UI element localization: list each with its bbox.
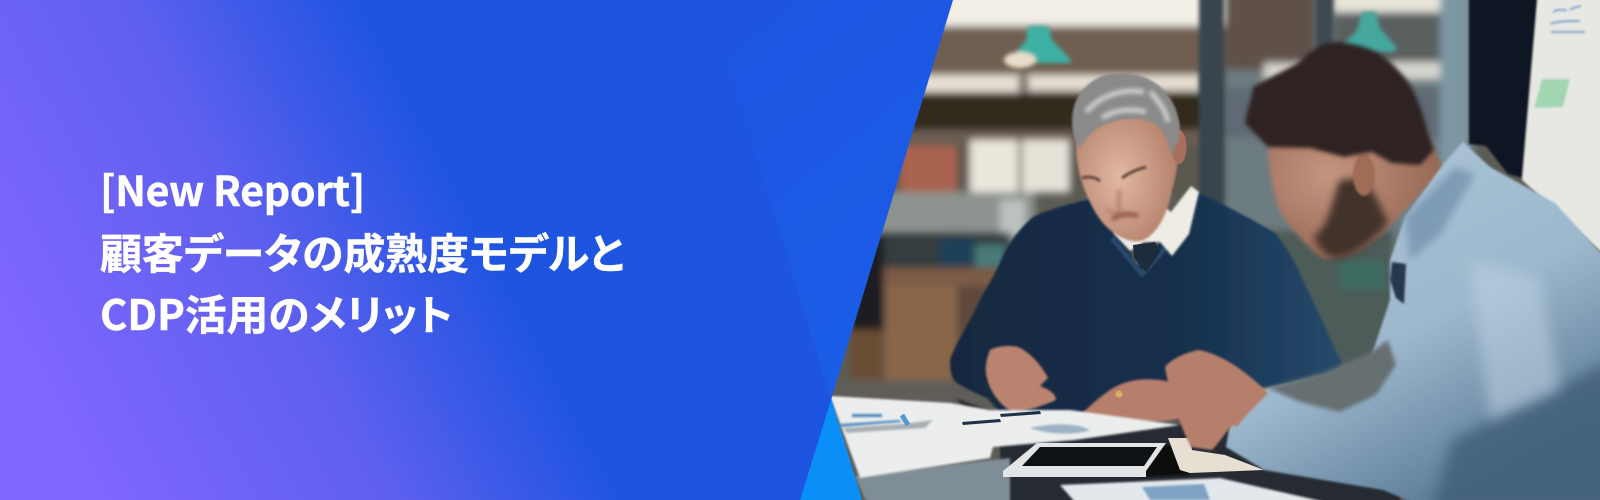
photo: two men reviewing reports at a table bbox=[800, 0, 1600, 500]
denim shirt bbox=[1226, 142, 1600, 500]
binder shadow bbox=[843, 420, 933, 433]
whiteboard bbox=[1522, 0, 1600, 260]
gray hair bbox=[1072, 73, 1180, 156]
man with denim shirt bbox=[1165, 42, 1600, 500]
photo background: blurred office interior bbox=[820, 0, 1474, 405]
shirt collar bbox=[1114, 186, 1199, 256]
placket shadow bbox=[1390, 262, 1406, 304]
paper, bottom bbox=[1060, 478, 1325, 500]
sleeve dark fold bbox=[1268, 340, 1396, 412]
report chart map bbox=[1030, 424, 1090, 434]
hand, resting bbox=[1073, 379, 1184, 423]
headline line 2: 顧客データの成熟度モデルと bbox=[100, 220, 624, 282]
tie bbox=[1133, 242, 1160, 272]
beard bbox=[1314, 178, 1388, 258]
tablet screen bbox=[1022, 447, 1157, 466]
tablet bbox=[1003, 443, 1166, 477]
mouth bbox=[1112, 214, 1138, 219]
dark hair bbox=[1245, 42, 1434, 165]
headline line 1: [New Report] bbox=[100, 158, 365, 218]
wedding ring bbox=[1116, 390, 1122, 398]
light blue triangle accent bbox=[800, 398, 862, 500]
hand, pointing bbox=[986, 346, 1056, 412]
sweater V-neck ribbing bbox=[1112, 192, 1192, 274]
blue facet panel bbox=[708, 0, 953, 400]
table top bbox=[955, 398, 1400, 500]
bottom sheet chart bars bbox=[1142, 484, 1210, 500]
photo base fill bbox=[800, 0, 1600, 500]
glass partition columns bbox=[1199, 0, 1333, 205]
collar shadow bbox=[1405, 167, 1475, 260]
nose shading bbox=[1106, 190, 1121, 213]
pendant lamp, right bbox=[1339, 12, 1397, 52]
shirt lower shading bbox=[1432, 360, 1600, 500]
brows and eye shading bbox=[1082, 167, 1146, 181]
pen bbox=[902, 415, 908, 425]
headline line 3: CDP活用のメリット bbox=[100, 283, 453, 343]
pendant lamp, left bbox=[1004, 26, 1071, 68]
notebook, right bbox=[1168, 438, 1264, 473]
face bbox=[1076, 99, 1179, 241]
man with sweater bbox=[950, 73, 1342, 423]
paper stack and notebook bbox=[830, 396, 1180, 478]
shirt highlight bbox=[1470, 260, 1560, 420]
main blue-purple gradient panel bbox=[0, 0, 831, 500]
report chart bars, left bbox=[840, 414, 901, 427]
dark curtain bbox=[1469, 0, 1538, 178]
ear bbox=[1353, 154, 1375, 196]
sweater body and arms bbox=[950, 190, 1342, 420]
tablet shadow bbox=[1140, 445, 1190, 477]
table and documents bbox=[830, 396, 1400, 500]
neck and face bbox=[1268, 120, 1444, 259]
report chart bars, center bbox=[962, 411, 1041, 425]
clasped hands bbox=[1165, 350, 1268, 450]
ear bbox=[1172, 130, 1186, 164]
headline text bbox=[100, 158, 624, 343]
hair highlights bbox=[1086, 91, 1168, 122]
sticky note bbox=[1534, 79, 1570, 108]
